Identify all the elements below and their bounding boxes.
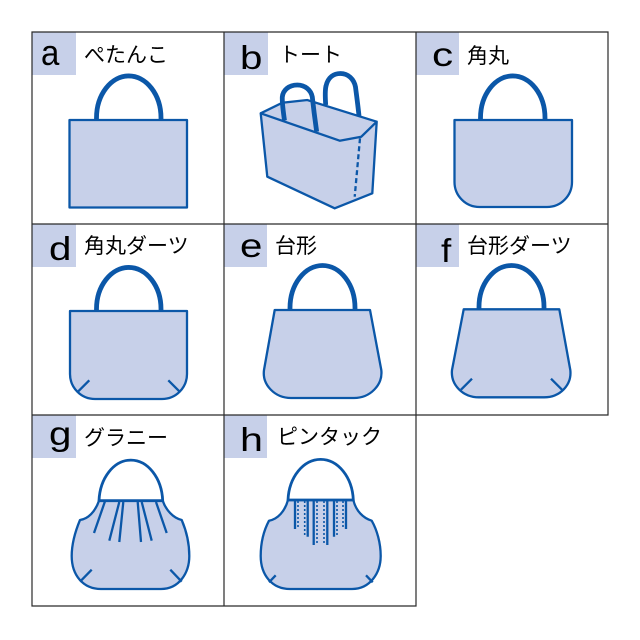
icon: pintuck bag [261, 459, 381, 589]
letter g: g [49, 415, 71, 452]
heading: トート: トート [279, 44, 342, 67]
icon: rounded bag with darts [70, 267, 187, 399]
icon: tote bag [261, 74, 377, 208]
icon: granny bag [72, 460, 189, 589]
heading: ピンタック: ピンタック [277, 426, 382, 449]
panel: b トート [224, 32, 416, 224]
heading: 台形: 台形 [275, 235, 317, 258]
heading: グラニー: グラニー [84, 427, 168, 450]
icon: trapezoid bag [264, 266, 381, 398]
panel: e 台形 [224, 224, 416, 415]
panel: f 台形ダーツ [416, 224, 608, 415]
label box b [224, 32, 268, 75]
panel: c 角丸 [416, 32, 608, 224]
label box f [416, 224, 459, 267]
label box d [32, 224, 76, 267]
icon: trapezoid bag with darts [452, 266, 570, 397]
heading: 角丸: 角丸 [467, 45, 509, 68]
label box g [32, 415, 76, 458]
letter f: f [441, 233, 452, 270]
letter c: c [432, 37, 453, 74]
icon: flat bag [70, 76, 187, 208]
letter d: d [49, 230, 71, 267]
panel: a ぺたんこ [32, 32, 224, 224]
label box e [224, 224, 267, 267]
panel: g グラニー [32, 415, 224, 606]
panel: d 角丸ダーツ [32, 224, 224, 415]
heading: 角丸ダーツ: 角丸ダーツ [84, 235, 189, 258]
heading: ぺたんこ: ぺたんこ [84, 44, 168, 67]
icon: rounded bag [454, 76, 572, 207]
label box h [224, 415, 267, 458]
letter b: b [240, 39, 262, 76]
label box c [416, 32, 459, 75]
letter h: h [240, 421, 263, 458]
panel: h ピンタック [224, 415, 416, 606]
letter a: a [41, 34, 60, 73]
letter e: e [240, 227, 262, 264]
label box a [32, 32, 76, 75]
heading: 台形ダーツ: 台形ダーツ [467, 235, 572, 258]
